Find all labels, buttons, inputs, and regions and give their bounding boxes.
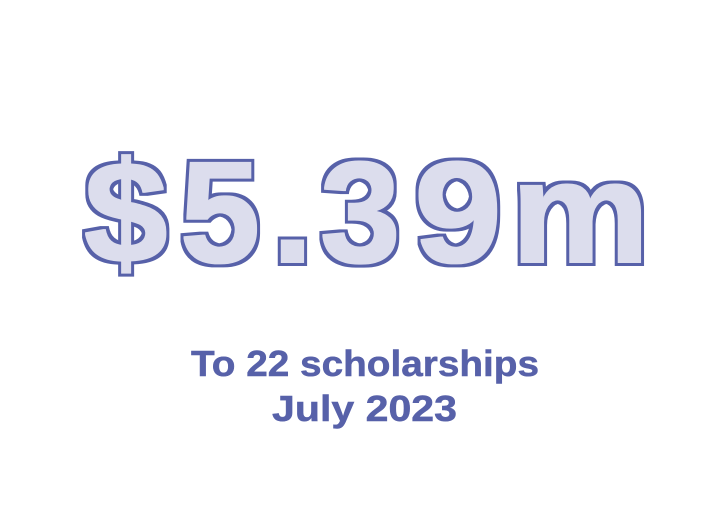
caption: To 22 scholarships: To 22 scholarships bbox=[191, 343, 539, 384]
headline figure: $5.39m: $ bbox=[84, 133, 168, 293]
headline figure: $5.39m bbox=[84, 131, 650, 293]
caption: July 2023: July 2023 bbox=[272, 388, 457, 429]
headline figure: $5.39m: m bbox=[511, 132, 650, 293]
headline figure: $5.39m: 3 bbox=[320, 131, 400, 293]
headline figure: $5.39m: 9 bbox=[414, 133, 502, 293]
headline figure: $5.39m: . bbox=[272, 132, 314, 293]
headline figure: $5.39m: 5 bbox=[180, 132, 260, 293]
